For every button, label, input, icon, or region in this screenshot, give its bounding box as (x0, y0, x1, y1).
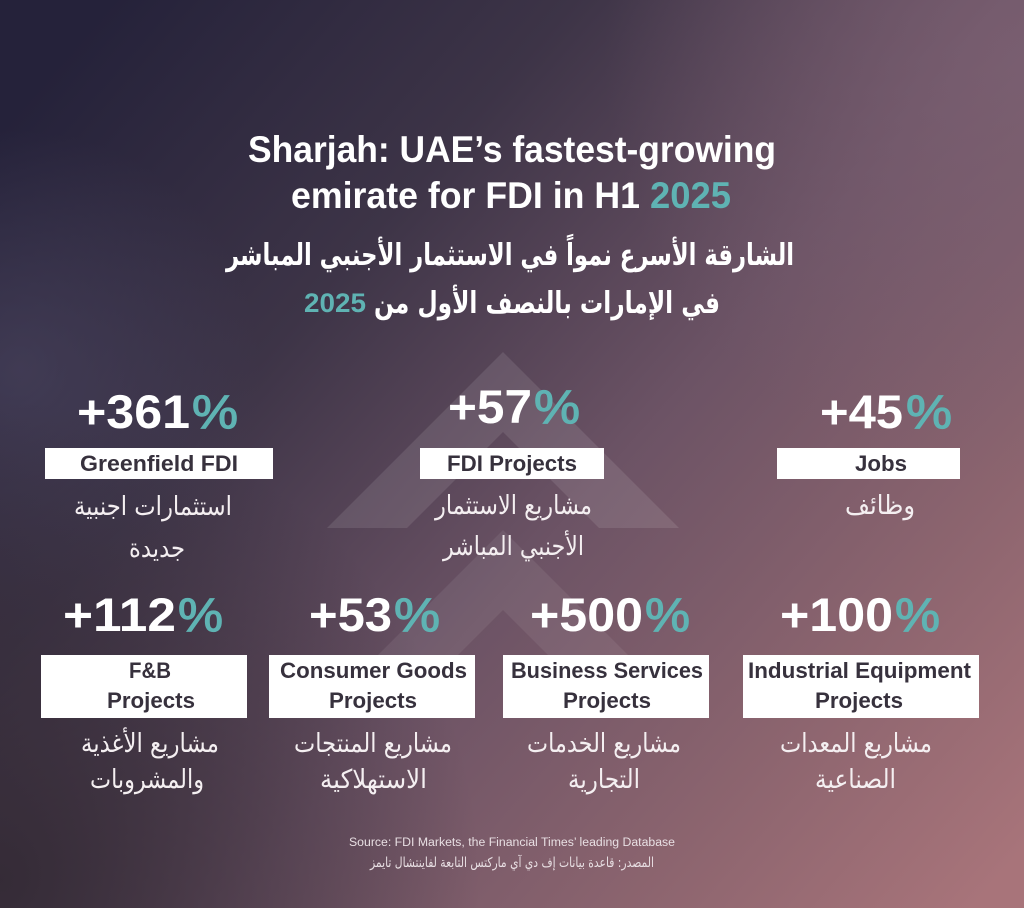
stat: consumer goods projects (269, 588, 475, 795)
source note (349, 837, 675, 871)
stat: industrial equipment projects (743, 588, 979, 795)
arabic title: الشارقة الأسرع نمواً في الاستثمار الأجنبي المباشر (224, 233, 794, 273)
source note: المصدر: قاعدة بيانات إف دي آي ماركتس التابعة لفاينتشال تايمز (369, 854, 654, 871)
stat: F&B projects: % (178, 588, 223, 641)
stat: business services projects: Projects (563, 688, 651, 713)
stat: jobs (777, 385, 960, 521)
stat: jobs: +45 (820, 385, 903, 438)
stat: business services projects (503, 588, 709, 795)
arabic title: 2025 (304, 288, 366, 318)
stat: F&B projects: F&B (129, 658, 171, 683)
stat: greenfield FDI: Greenfield FDI (80, 451, 238, 476)
stat: F&B projects: مشاريع الأغذية (81, 726, 219, 759)
stat: business services projects: +500 (530, 588, 643, 641)
source note: Source: FDI Markets, the Financial Times’ leading Database (349, 837, 675, 849)
stat: business services projects: Business Services (511, 658, 703, 683)
stat: industrial equipment projects: Industrial Equipment (748, 658, 972, 683)
stat: greenfield FDI: استثمارات اجنبية (74, 492, 232, 522)
arabic title (224, 233, 794, 321)
stat: business services projects: مشاريع الخدمات (527, 729, 681, 759)
stat: consumer goods projects: Consumer Goods (280, 658, 467, 683)
stat: consumer goods projects: Projects (329, 688, 417, 713)
title (248, 129, 776, 216)
stat: greenfield FDI (45, 385, 273, 564)
stat: industrial equipment projects: +100 (780, 588, 893, 641)
stat: industrial equipment projects: الصناعية (815, 765, 896, 795)
stat: F&B projects: والمشروبات (90, 765, 204, 795)
stat: business services projects: التجارية (568, 765, 640, 795)
stat: greenfield FDI: % (192, 385, 238, 438)
stat: business services projects: % (645, 588, 690, 641)
stat: greenfield FDI: جديدة (129, 534, 185, 564)
stat: F&B projects: Projects (107, 688, 195, 713)
stat: jobs: وظائف (845, 491, 915, 521)
stat: F&B projects (41, 588, 247, 795)
stat: FDI projects: +57 (448, 380, 532, 433)
stat: consumer goods projects: مشاريع المنتجات (294, 729, 452, 759)
stat: consumer goods projects: الاستهلاكية (320, 765, 427, 795)
stat: FDI projects: FDI Projects (447, 451, 577, 476)
stat: FDI projects: مشاريع الاستثمار (433, 491, 592, 521)
stat: consumer goods projects: % (394, 588, 440, 641)
stat: industrial equipment projects: Projects (815, 688, 903, 713)
stat: consumer goods projects: +53 (309, 588, 392, 641)
stat: jobs: Jobs (855, 451, 907, 476)
title: Sharjah: UAE’s fastest-growing (248, 129, 776, 170)
title: 2025 (650, 175, 731, 216)
stat: FDI projects: % (534, 380, 580, 433)
stat: jobs: % (906, 385, 952, 438)
stat: FDI projects (420, 380, 604, 562)
stat: industrial equipment projects: % (895, 588, 940, 641)
stat: FDI projects: الأجنبي المباشر (441, 529, 584, 562)
stat: greenfield FDI: +361 (77, 385, 190, 438)
stat: industrial equipment projects: مشاريع المعدات (780, 729, 932, 759)
icon: upward chevron arrows (327, 352, 679, 706)
stat: F&B projects: +112 (63, 588, 176, 641)
arabic title: في الإمارات بالنصف الأول من (374, 284, 720, 321)
title: emirate for FDI in H1 (291, 175, 640, 216)
